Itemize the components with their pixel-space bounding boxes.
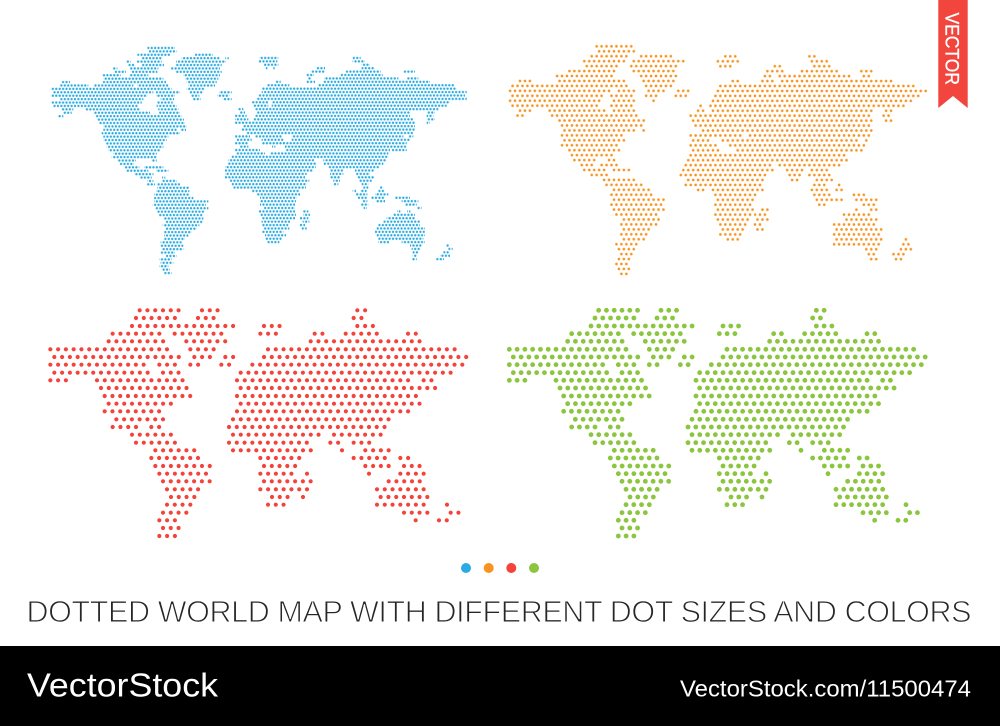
blue world map: smallest dots bbox=[51, 48, 467, 273]
title: DOTTED WORLD MAP WITH DIFFERENT DOT SIZES AND COLORS bbox=[26, 595, 972, 629]
footer logo text: VectorStock bbox=[27, 668, 218, 705]
ribbon badge: VECTOR: VECTOR bbox=[940, 12, 962, 85]
orange world map: small dots bbox=[510, 46, 926, 274]
footer image id: VectorStock.com/11500474 bbox=[680, 676, 971, 702]
ribbon badge: VECTOR bbox=[938, 0, 968, 108]
colour legend dots bbox=[461, 563, 539, 573]
footer bar bbox=[0, 646, 1000, 726]
green world map: largest dots bbox=[509, 310, 926, 536]
red world map: medium dots bbox=[50, 310, 467, 536]
